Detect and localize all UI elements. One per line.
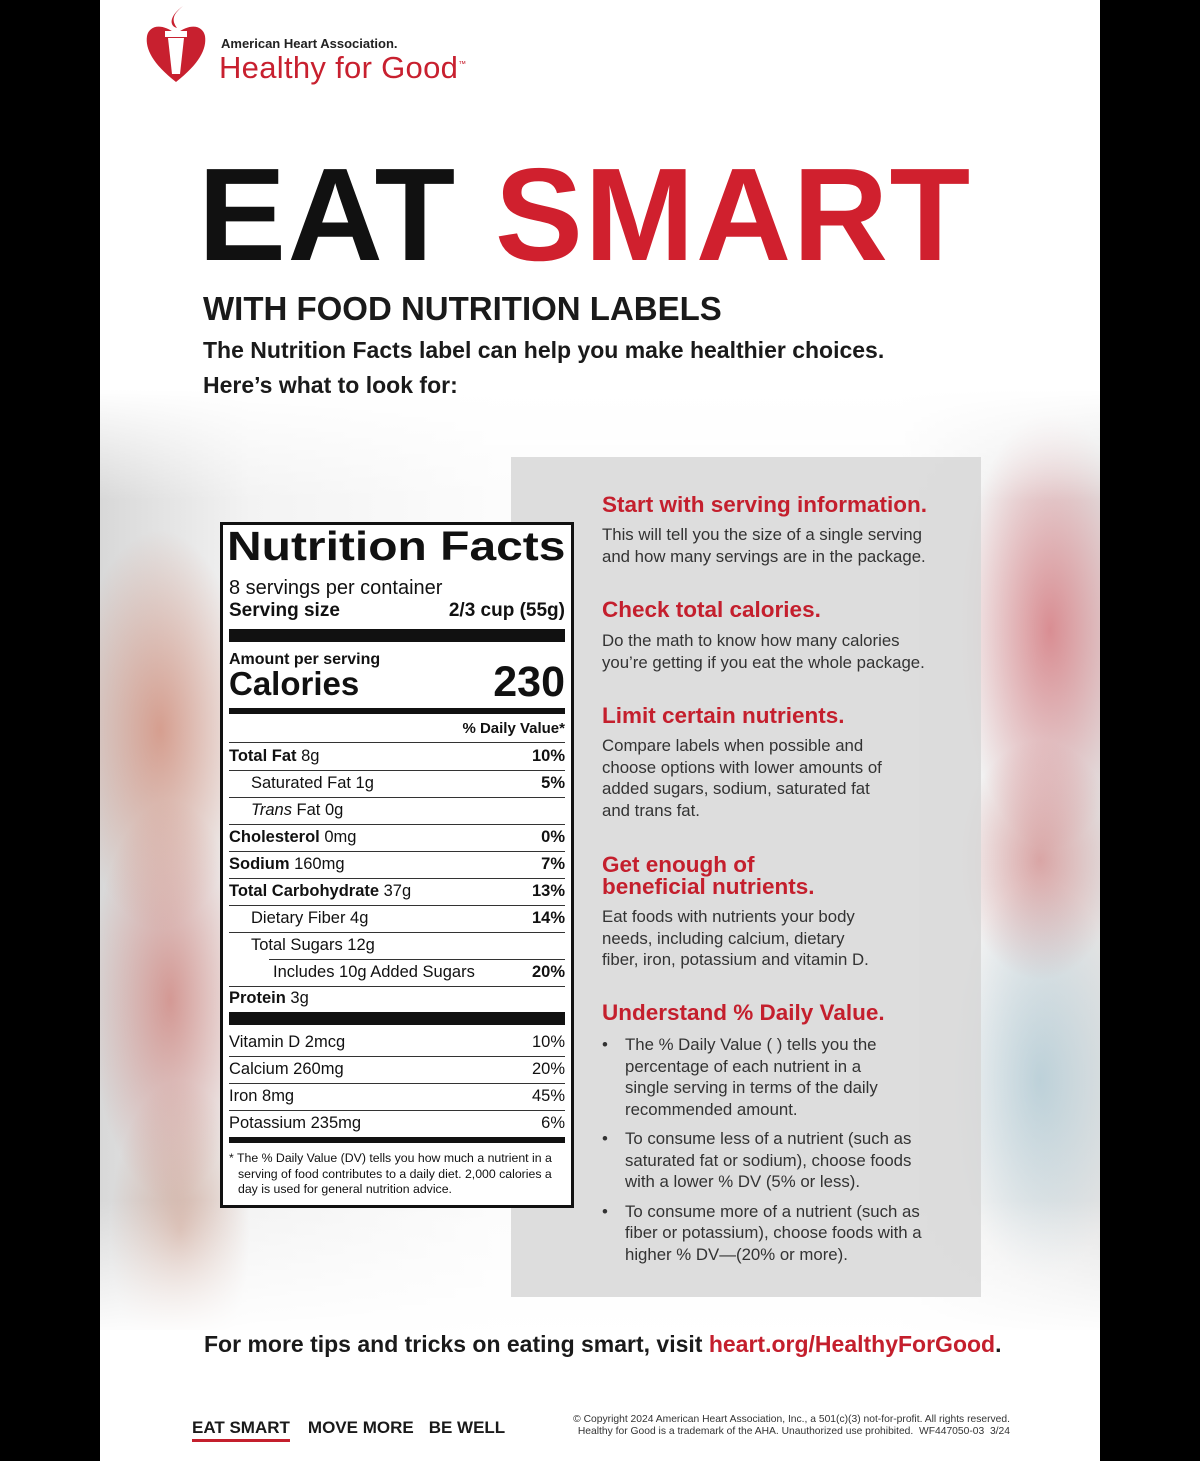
panel: grey tips panel: [511, 457, 981, 1297]
nutrition facts label: 5%: [541, 774, 565, 792]
nutrition facts label: Calories: [229, 665, 359, 702]
copyright: Healthy for Good is a trademark of the AHA. Unauthorized use prohibited. WF447050-03 3/24: [578, 1426, 1010, 1437]
nutrition facts label: Trans Fat 0g: [251, 801, 343, 819]
nutrition facts label: Total Carbohydrate 37g: [229, 882, 411, 900]
text: with a lower % DV (5% or less).: [625, 1172, 860, 1191]
text: To consume less of a nutrient (such as: [625, 1129, 911, 1148]
tip 4: beneficial nutrients.: [602, 874, 815, 899]
intro text: Here’s what to look for:: [203, 372, 458, 398]
nutrition facts label: 20%: [532, 963, 565, 981]
text: needs, including calcium, dietary: [602, 928, 845, 948]
nutrition facts label: Protein 3g: [229, 989, 309, 1007]
tip 4: Get enough of: [602, 852, 754, 877]
text: higher % DV—(20% or more).: [625, 1244, 848, 1264]
text: single serving in terms of the daily: [625, 1078, 878, 1097]
text: added sugars, sodium, saturated fat: [602, 779, 870, 798]
tip 3: Limit certain nutrients.: [602, 703, 845, 728]
nutrition facts label: % Daily Value*: [462, 720, 565, 737]
tip 1: Start with serving information.: [602, 492, 927, 517]
text: and trans fat.: [602, 800, 700, 820]
nutrition facts label: 230: [493, 658, 565, 706]
text: This will tell you the size of a single serving: [602, 525, 922, 544]
nutrition facts label: Iron 8mg: [229, 1087, 294, 1105]
text: •: [602, 1202, 608, 1220]
nutrition facts label: 2/3 cup (55g): [449, 600, 565, 621]
text: recommended amount.: [625, 1100, 798, 1118]
nutrition facts label: 0%: [541, 828, 565, 846]
text: percentage of each nutrient in a: [625, 1056, 861, 1076]
nutrition facts label: 7%: [541, 855, 565, 873]
nutrition facts label: Potassium 235mg: [229, 1114, 361, 1132]
text: The % Daily Value ( ) tells you the: [625, 1035, 877, 1054]
copyright: [573, 1414, 1010, 1437]
tip 2: Check total calories.: [602, 597, 821, 622]
text: Compare labels when possible and: [602, 736, 863, 755]
nutrition facts label: [220, 522, 574, 1208]
text: •: [602, 1035, 608, 1054]
nutrition facts label: Includes 10g Added Sugars: [273, 963, 475, 981]
nutrition facts label: * The % Daily Value (DV) tells you how much a nutrient in a serving of food contributes to a daily diet. 2,000 calories a day is used for general nutrition advice.: [229, 1151, 552, 1196]
logo: Healthy for Good™: [219, 50, 466, 85]
intro text: The Nutrition Facts label can help you make healthier choices.: [203, 337, 884, 363]
text: fiber, iron, potassium and vitamin D.: [602, 950, 869, 969]
nutrition facts label: Calcium 260mg: [229, 1060, 344, 1078]
text: you’re getting if you eat the whole package.: [602, 652, 925, 672]
tip 5: Understand % Daily Value.: [602, 1000, 885, 1025]
text: and how many servings are in the package.: [602, 546, 926, 566]
nutrition facts label: Vitamin D 2mcg: [229, 1033, 345, 1051]
nutrition facts label: 6%: [541, 1114, 565, 1132]
text: •: [602, 1129, 608, 1148]
intro text: [203, 337, 884, 398]
nutrition facts label: 10%: [532, 747, 565, 765]
nutrition facts label: Total Fat 8g: [229, 747, 319, 765]
logo: [146, 6, 466, 85]
nutrition facts label: 8 servings per container: [229, 577, 442, 599]
nutrition facts label: Nutrition Facts: [227, 523, 565, 569]
logo: American Heart Association.: [221, 36, 398, 51]
nutrition facts label: 10%: [532, 1033, 565, 1051]
text: fiber or potassium), choose foods with a: [625, 1223, 922, 1242]
nutrition facts label: 20%: [532, 1060, 565, 1078]
nutrition facts label: Amount per serving: [229, 651, 380, 668]
text: To consume more of a nutrient (such as: [625, 1202, 920, 1220]
footer link text: For more tips and tricks on eating smart, visit heart.org/HealthyForGood.: [204, 1331, 1001, 1357]
text: choose options with lower amounts of: [602, 758, 882, 776]
text: saturated fat or sodium), choose foods: [625, 1150, 911, 1170]
subtitle: WITH FOOD NUTRITION LABELS: [203, 290, 722, 327]
nutrition facts label: Dietary Fiber 4g: [251, 909, 368, 927]
background: supermarket aisle: [100, 380, 1100, 1330]
nutrition facts label: Total Sugars 12g: [251, 936, 375, 954]
nutrition facts label: 45%: [532, 1087, 565, 1105]
title: EAT SMART: [198, 141, 972, 288]
text: Do the math to know how many calories: [602, 631, 900, 650]
nutrition facts label: Sodium 160mg: [229, 855, 345, 873]
footer nav: EAT SMART MOVE MORE BE WELL: [192, 1418, 505, 1437]
nutrition facts label: Cholesterol 0mg: [229, 828, 356, 846]
nutrition facts label: 14%: [532, 909, 565, 927]
tip 4: [602, 852, 815, 899]
nutrition facts label: Serving size: [229, 600, 340, 621]
nutrition facts label: 13%: [532, 882, 565, 900]
nutrition facts label: Saturated Fat 1g: [251, 774, 374, 792]
text: Eat foods with nutrients your body: [602, 907, 855, 926]
copyright: © Copyright 2024 American Heart Association, Inc., a 501(c)(3) not-for-profit. All rights reserved.: [573, 1414, 1010, 1425]
